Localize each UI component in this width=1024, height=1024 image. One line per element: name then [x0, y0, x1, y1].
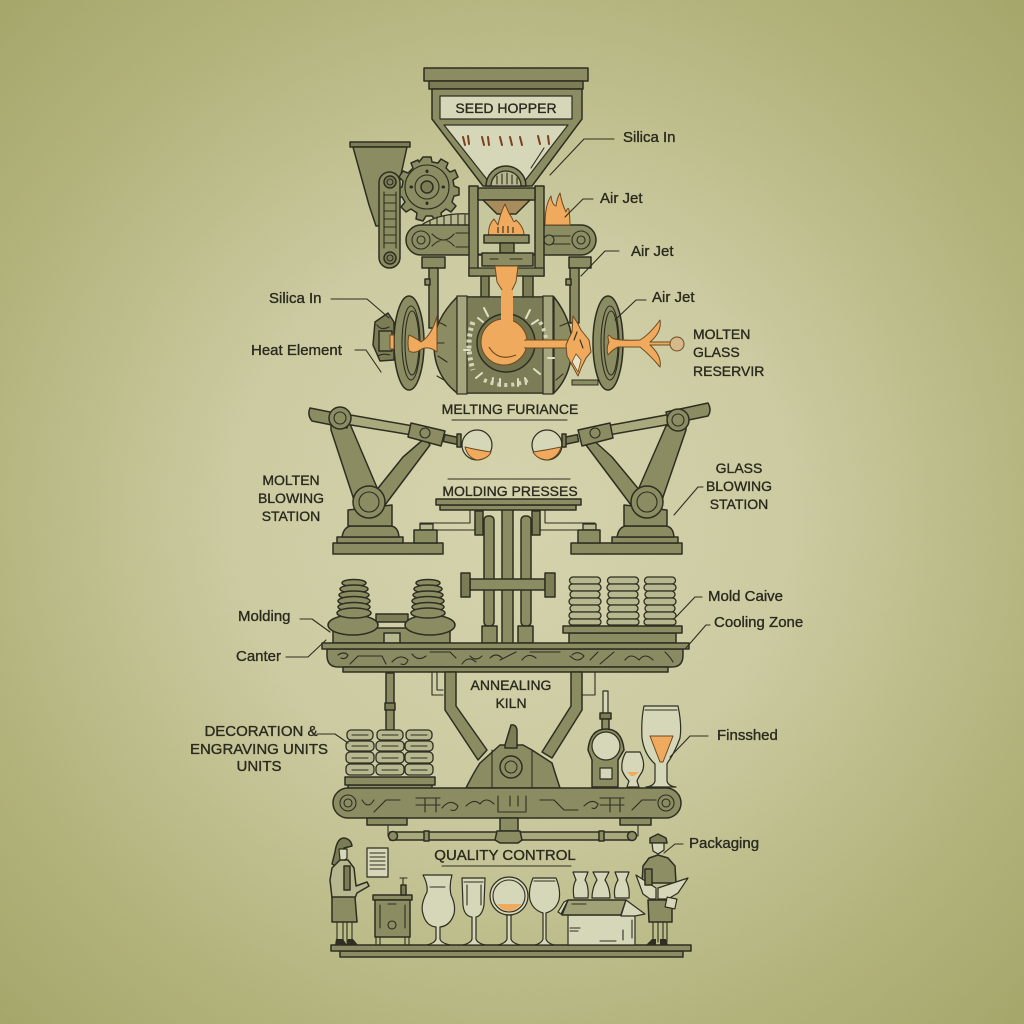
label: heat element [251, 342, 381, 372]
label: cooling zone: Cooling Zone [714, 614, 803, 631]
label: finished [670, 727, 778, 757]
label: air jet 2: Air Jet [631, 243, 674, 260]
linkage [420, 510, 475, 530]
label: silica in (top right): Silica In [623, 129, 676, 146]
label: silica in (left): Silica In [269, 290, 322, 307]
inspection cabinet [373, 878, 412, 945]
clipboard [367, 848, 388, 877]
glass 4 [529, 878, 560, 945]
panel: upper conveyor and flames [406, 193, 596, 255]
bottles in box [573, 872, 629, 898]
gear [397, 157, 459, 221]
furnace body [434, 296, 572, 394]
inspector figure [330, 838, 369, 945]
label: glass blowing station [674, 460, 772, 515]
small glass [622, 752, 644, 787]
heading: annealing kiln: KILN [495, 695, 527, 711]
label: decoration and engraving units [190, 723, 348, 775]
panel: molding presses [436, 499, 581, 644]
label: mold cave [676, 588, 783, 617]
molten pipe right [525, 340, 572, 348]
linkage [540, 510, 595, 530]
heading: quality control: QUALITY CONTROL [434, 847, 576, 864]
flask [532, 430, 566, 460]
label: decoration and engraving units: ENGRAVING UNITS [190, 741, 328, 758]
gauge [588, 691, 624, 787]
heading: molding presses: MOLDING PRESSES [442, 483, 578, 499]
label: molten blowing station: STATION [262, 508, 320, 524]
central flame [489, 204, 524, 238]
label: decoration and engraving units: UNITS [236, 758, 282, 775]
coil stack [337, 580, 371, 618]
panel: left molding units [328, 580, 455, 643]
panel: lower conveyor [333, 788, 681, 843]
stack [644, 577, 676, 625]
label: silica in (left) [269, 290, 389, 318]
coil stack [411, 580, 445, 618]
panel: support legs [422, 257, 591, 328]
big glass [642, 706, 681, 787]
hopper label: SEED HOPPER [455, 100, 557, 116]
label: air jet 3 [615, 289, 695, 320]
stack [607, 577, 639, 625]
label: decoration and engraving units: DECORATION & [204, 723, 318, 740]
label: air jet 3: Air Jet [652, 289, 695, 306]
left molten spout [408, 316, 437, 352]
label: packaging [664, 835, 759, 853]
panel: seed hopper [424, 68, 588, 186]
stack [569, 577, 601, 625]
label: canter: Canter [236, 648, 281, 665]
heading: annealing kiln [471, 677, 551, 711]
outlet branch [607, 320, 672, 367]
panel: press frame [469, 166, 544, 298]
label: molten glass reservoir: MOLTEN [693, 326, 750, 342]
label: molten glass reservoir: RESERVIR [693, 363, 764, 379]
label: air jet 2 [581, 243, 674, 276]
label: molten blowing station [258, 472, 324, 524]
label: cooling zone [686, 614, 803, 648]
stack [346, 730, 374, 775]
panel: right mold stacks [563, 577, 682, 643]
hopper label [440, 96, 572, 119]
label: molding: Molding [238, 608, 291, 625]
stack [376, 730, 404, 775]
panel: decorated table [322, 643, 689, 672]
label: heat element: Heat Element [251, 342, 343, 359]
panel: melting furnace [373, 266, 684, 394]
flame: right of frame [545, 193, 570, 225]
glass 1 [422, 875, 455, 945]
packer figure [636, 834, 688, 945]
label: finished: Finsshed [717, 727, 778, 744]
panel: quality control shelf [331, 945, 691, 957]
panel: left feeder and gear [350, 142, 459, 268]
dome valve [486, 166, 526, 186]
flask [457, 430, 492, 460]
label: glass blowing station: GLASS [716, 460, 762, 476]
flame at furnace [566, 316, 591, 376]
vertical belt [379, 172, 400, 268]
label: packaging: Packaging [689, 835, 759, 852]
label: glass blowing station: BLOWING [706, 478, 772, 494]
label: molten blowing station: MOLTEN [262, 472, 320, 488]
label: molten blowing station: BLOWING [258, 490, 324, 506]
panel: left robot arm [309, 407, 492, 554]
panel: kiln press [466, 725, 560, 788]
label: molding [238, 608, 330, 632]
label: canter [236, 640, 326, 665]
left wheel [394, 296, 424, 390]
stack [405, 730, 433, 775]
label: air jet 1: Air Jet [600, 190, 643, 207]
outlet bulb [670, 337, 684, 351]
panel: decoration stacks [345, 673, 435, 789]
heat element [373, 313, 394, 361]
right wheel [593, 296, 623, 390]
furnace crucible [477, 314, 535, 372]
panel: right robot arm [532, 403, 710, 554]
panel: annealing kiln feed [432, 672, 595, 760]
label: air jet 1 [565, 190, 643, 217]
molten stream from press [495, 266, 518, 331]
panel: finished items on conveyor [588, 691, 681, 787]
heading: annealing kiln: ANNEALING [471, 677, 551, 693]
label: silica in (top right) [550, 129, 676, 175]
glass 2 [462, 878, 485, 945]
label: molten glass reservoir [693, 326, 764, 379]
label: glass blowing station: STATION [710, 496, 768, 512]
glass 3 [490, 877, 528, 945]
label: mold cave: Mold Caive [708, 588, 783, 605]
label: molten glass reservoir: GLASS [693, 344, 740, 360]
heading: melting furnace: MELTING FURIANCE [442, 401, 578, 417]
packing box [558, 900, 645, 945]
